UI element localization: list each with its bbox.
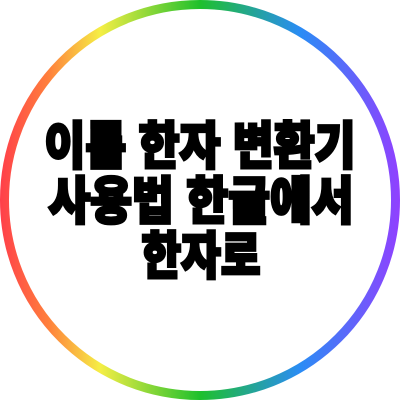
title: 이름 한자 변환기 [44, 118, 356, 175]
title [44, 118, 356, 285]
title: 사용법 한글에서 [48, 173, 354, 230]
title: 한자로 [142, 228, 260, 285]
